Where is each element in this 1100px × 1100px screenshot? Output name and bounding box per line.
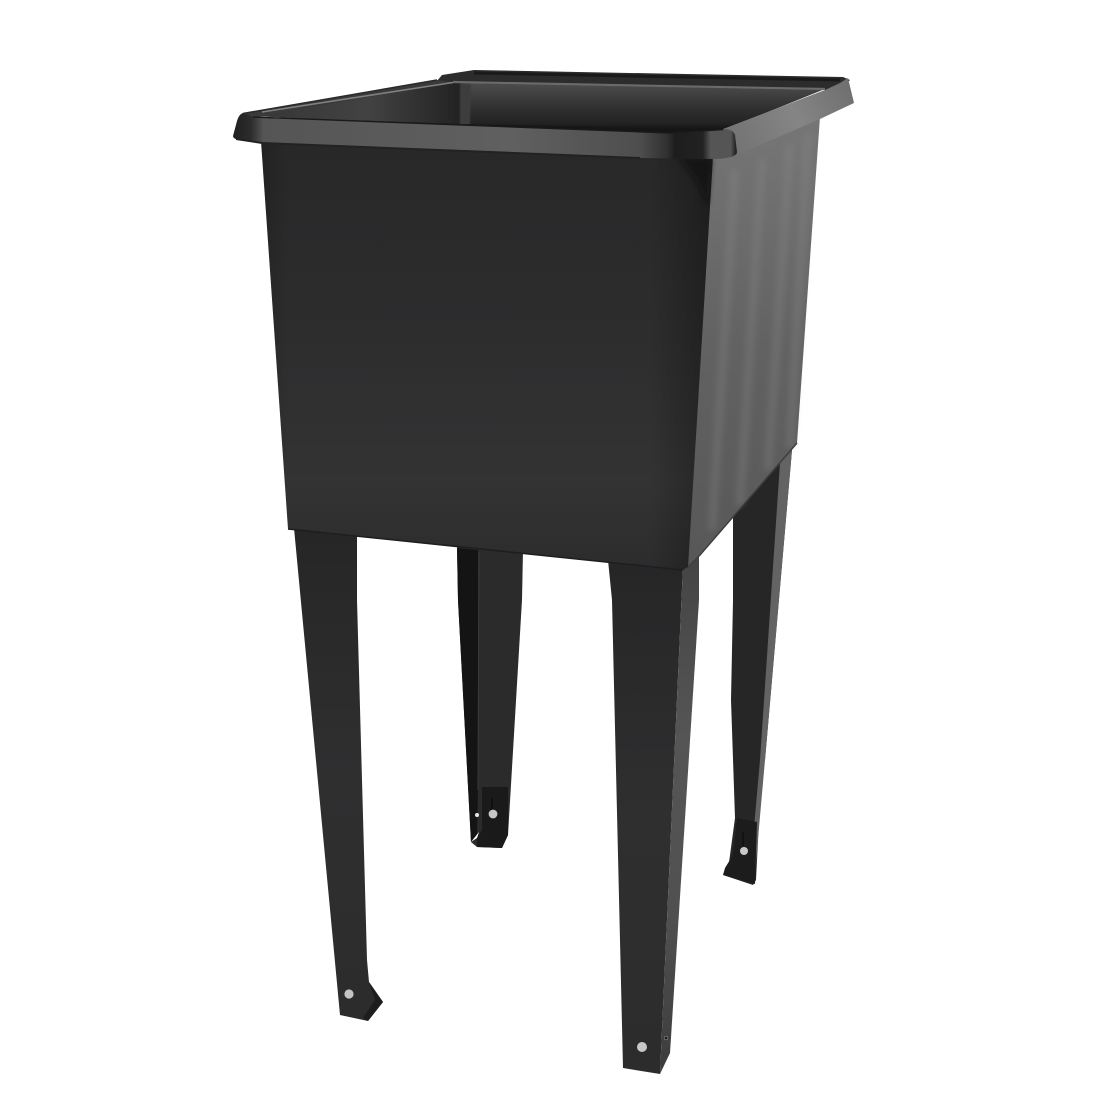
tub front wall xyxy=(261,141,713,570)
right rim xyxy=(723,78,854,155)
tub right side wall xyxy=(683,117,820,570)
foot bracket xyxy=(471,787,508,848)
tub interior xyxy=(253,81,825,134)
back middle leg xyxy=(457,545,523,848)
left rim xyxy=(243,80,453,118)
foot bracket xyxy=(723,818,757,884)
front rim xyxy=(233,113,737,159)
back right leg xyxy=(723,450,792,885)
back rim xyxy=(437,70,850,90)
bolt xyxy=(637,1042,647,1052)
front left leg xyxy=(294,528,383,1021)
front right leg xyxy=(608,556,699,1074)
bolt xyxy=(344,989,354,999)
